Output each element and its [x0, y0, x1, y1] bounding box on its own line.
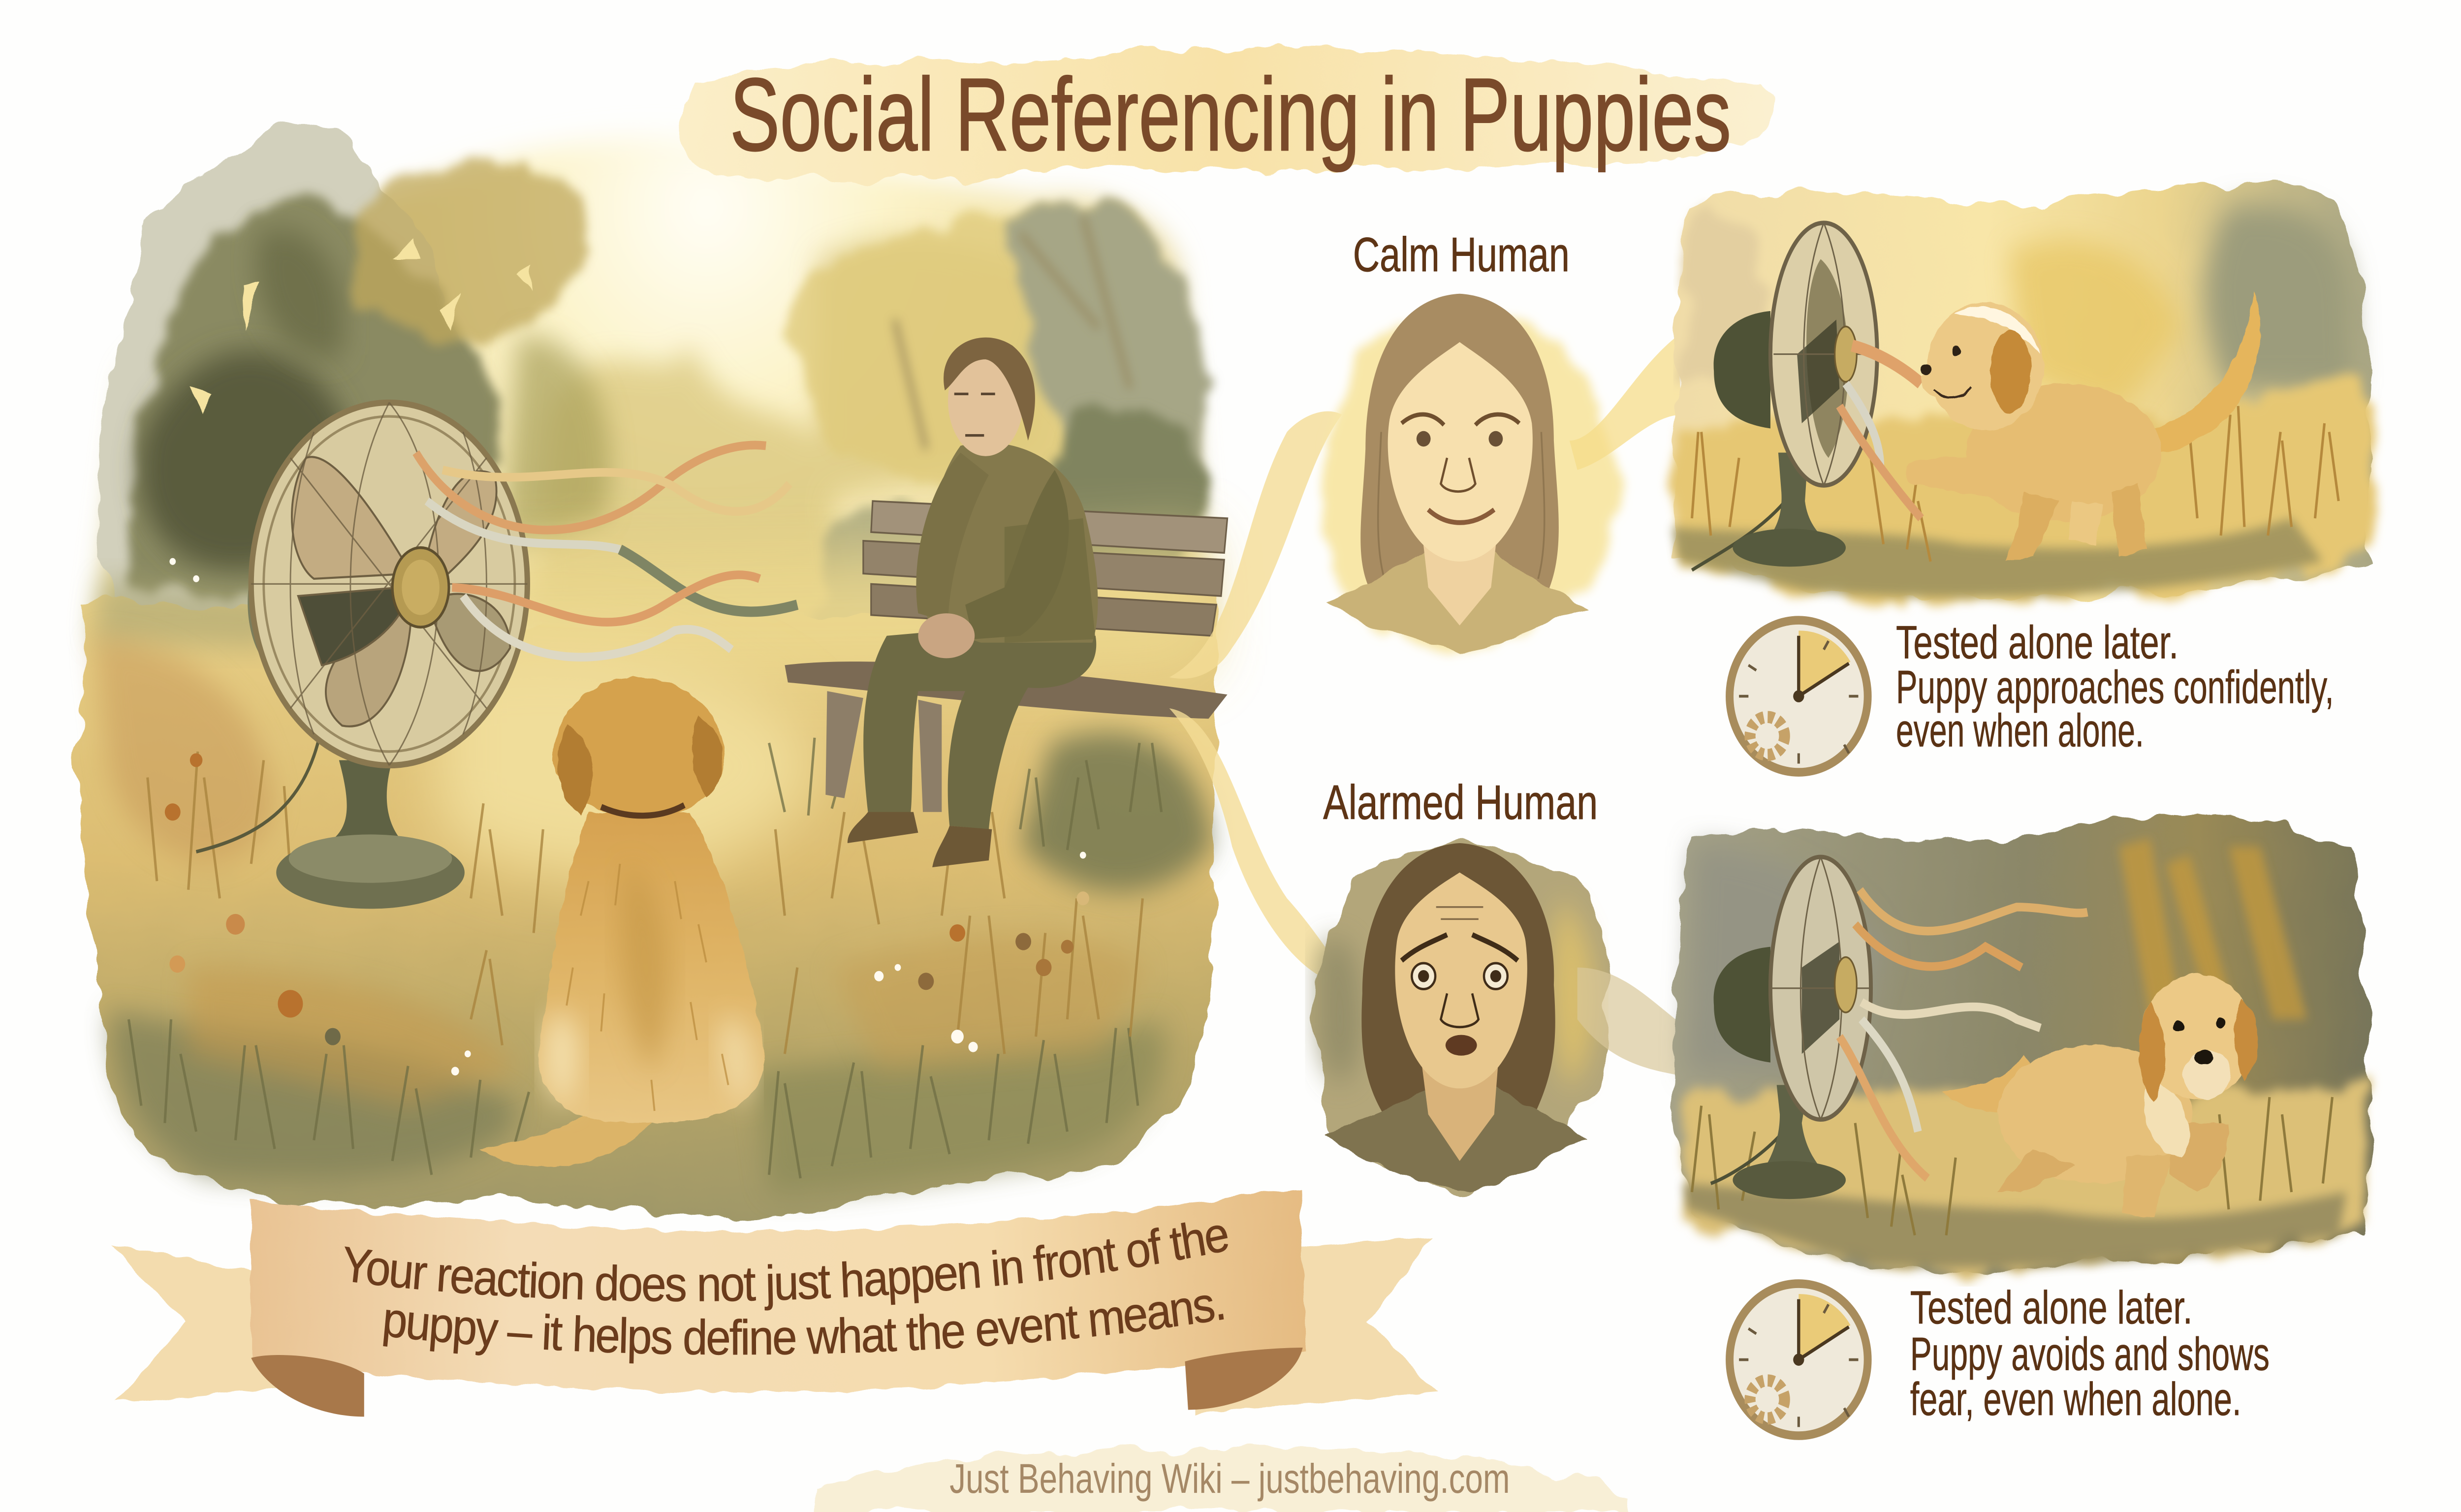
fur strokes	[567, 864, 728, 1111]
meadow	[78, 536, 1217, 1216]
wooden bench	[785, 501, 1228, 812]
dark background	[1676, 814, 2373, 1271]
puppy	[1906, 290, 2260, 562]
title text: Social Referencing in Puppies	[730, 57, 1731, 172]
face	[1395, 873, 1527, 1088]
arms	[916, 453, 989, 622]
fan grille lines	[251, 403, 527, 765]
flow to alarmed human	[1169, 708, 1350, 985]
title wash	[680, 48, 1771, 181]
flow ribbons from bench to humans	[1169, 411, 1350, 985]
fan stand	[196, 725, 465, 909]
fan motor	[248, 536, 353, 665]
ribbons blowing from fan	[416, 445, 797, 657]
right tree group	[785, 199, 1206, 639]
calm human label: Calm Human	[1353, 227, 1570, 282]
shoes	[848, 812, 918, 843]
fan cage	[251, 403, 527, 765]
outcome text top: even when alone.	[1896, 705, 2144, 756]
scroll body	[251, 1189, 1306, 1392]
gold streaks	[2119, 838, 2307, 1037]
outcome text top: Tested alone later.	[1896, 617, 2178, 668]
outcome text top	[1896, 617, 2334, 756]
left curl	[251, 1355, 364, 1417]
shoulders	[1326, 549, 1588, 653]
footer	[816, 1448, 1632, 1512]
dark tree upper left	[95, 124, 510, 648]
head	[552, 677, 725, 817]
outcome text bottom: Puppy avoids and shows	[1910, 1328, 2270, 1381]
olive trees	[2205, 205, 2354, 389]
sky wash	[94, 138, 1208, 639]
flow to calm human	[1169, 411, 1342, 679]
main scene: park with fan, human and puppy	[78, 124, 1228, 1216]
alarmed human label: Alarmed Human	[1323, 775, 1598, 829]
outcome text bottom	[1910, 1282, 2270, 1425]
scene: puppy avoids fan	[1676, 814, 2373, 1271]
wild flowers	[165, 753, 1089, 1045]
hair strands	[1378, 432, 1545, 579]
ribbons	[1852, 346, 1921, 383]
meadow	[1676, 1080, 2370, 1268]
large desk fan	[196, 403, 527, 909]
calm human portrait	[1326, 294, 1615, 653]
fan	[1692, 223, 1877, 570]
hair	[1361, 843, 1555, 1123]
distant pale trees	[534, 237, 1067, 639]
head	[948, 346, 1023, 456]
alarmed human flow to scene	[1578, 968, 1714, 1080]
face	[1388, 342, 1533, 562]
fan blades	[292, 457, 510, 726]
clock icon top	[1730, 620, 1868, 772]
banner text: Your reaction does not just happen in front of the	[345, 1223, 1228, 1310]
outcome text bottom: Tested alone later.	[1910, 1282, 2193, 1334]
grass strokes	[1692, 406, 2338, 562]
puppy	[1943, 975, 2258, 1218]
outcome text top: Puppy approaches confidently,	[1896, 662, 2334, 714]
eyes and mouth	[954, 394, 995, 436]
neck	[1420, 518, 1499, 626]
torso	[924, 442, 1098, 643]
right tail	[1193, 1237, 1436, 1413]
calm human flow to scene	[1570, 337, 1682, 470]
grey at fan back	[1687, 847, 1884, 1071]
alarmed human portrait	[1316, 843, 1609, 1192]
facial features	[1402, 414, 1519, 523]
body	[538, 812, 764, 1123]
left tail	[110, 1244, 364, 1403]
upper background	[1674, 184, 2370, 598]
facial features	[1402, 907, 1518, 1027]
grass strokes	[1692, 1097, 2333, 1235]
tan wash at left	[1682, 211, 1773, 380]
sitting puppy seen from behind	[479, 677, 764, 1167]
olive halo	[1316, 845, 1609, 1192]
scene: puppy approaches fan	[1672, 184, 2370, 599]
ears	[558, 725, 593, 816]
footer wash	[816, 1448, 1632, 1512]
grass strokes	[128, 738, 1162, 1178]
collar	[601, 805, 684, 816]
banner text	[345, 1223, 1228, 1363]
fan hub	[392, 548, 449, 627]
title banner	[680, 48, 1771, 181]
neck	[1420, 1054, 1499, 1161]
clock icon bottom	[1730, 1284, 1868, 1436]
hair back	[1360, 294, 1559, 596]
fan	[1711, 857, 1871, 1199]
yellow halo	[1328, 320, 1615, 653]
horizon blend bands	[471, 536, 1208, 680]
legs	[863, 626, 1096, 829]
hands	[918, 613, 975, 658]
right curl	[1185, 1348, 1303, 1410]
golden foliage	[189, 163, 610, 553]
outcome text bottom: fear, even when alone.	[1910, 1373, 2241, 1425]
ribbons	[1839, 890, 2087, 1178]
meadow	[1672, 372, 2370, 599]
shoulders	[1326, 1085, 1588, 1192]
message scroll banner	[111, 1190, 1438, 1417]
seated human	[848, 338, 1098, 867]
banner text: puppy – it helps define what the event means.	[383, 1295, 1224, 1363]
tail	[479, 1085, 659, 1167]
footer text: Just Behaving Wiki – justbehaving.com	[949, 1455, 1510, 1502]
